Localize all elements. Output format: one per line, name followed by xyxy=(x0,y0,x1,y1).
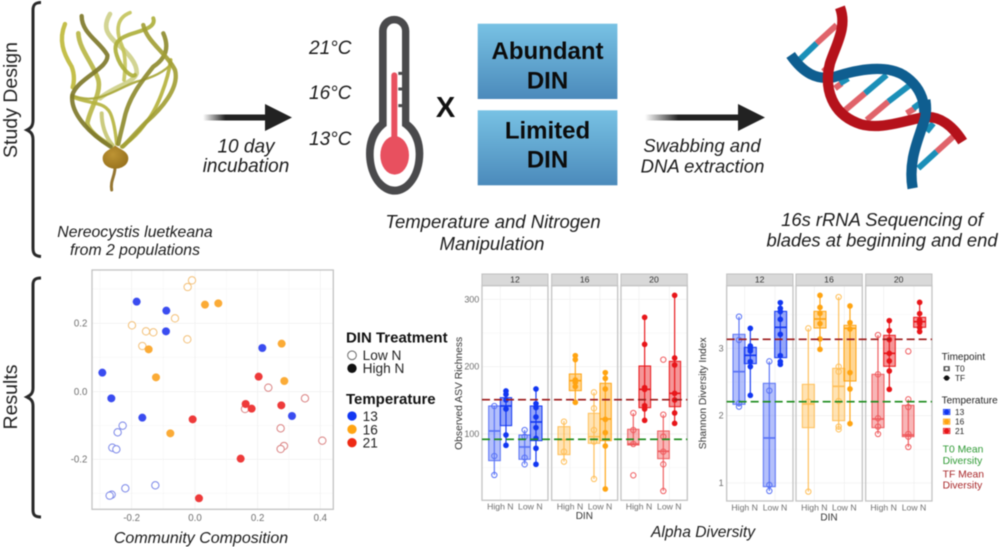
caption: species xyxy=(57,224,213,259)
Shannon axis labels: High N xyxy=(731,502,758,512)
Shannon axis labels: Low N xyxy=(902,502,926,512)
temperature labels: 13°C xyxy=(309,129,352,150)
temperature labels: 21°C xyxy=(308,38,352,59)
facet panels: 16 xyxy=(824,275,834,285)
legend: DIN treatment and temperature: High N xyxy=(363,361,404,376)
legend: DIN treatment and temperature: 16 xyxy=(363,422,378,437)
filled orange points xyxy=(145,299,288,437)
scatter y axis labels: -0.2 xyxy=(71,455,87,466)
caption: incubation: 10 day xyxy=(217,136,276,158)
legend: TF mean diversity: TF Mean xyxy=(943,469,984,480)
box: Limited DIN: Limited xyxy=(505,117,590,144)
arrow: incubation xyxy=(203,104,292,131)
richness axis labels xyxy=(454,294,682,522)
caption: species: Nereocystis luetkeana xyxy=(57,224,213,241)
box: Abundant DIN: DIN xyxy=(527,67,568,94)
caption: species: from 2 populations xyxy=(70,242,200,259)
box: Limited DIN xyxy=(478,110,617,185)
legend: timepoint xyxy=(942,352,985,383)
facet panels xyxy=(727,274,932,501)
icon: DNA helix xyxy=(791,7,963,188)
filled blue points xyxy=(98,298,296,422)
legend: DIN treatment and temperature: Low N xyxy=(363,348,401,363)
caption: manipulation xyxy=(385,211,601,254)
scatter x axis labels xyxy=(123,513,328,524)
scatter x axis labels: 0.4 xyxy=(314,513,328,524)
heading: Study Design: Study Design xyxy=(0,42,22,158)
facet panels: 20 xyxy=(894,275,904,285)
box: Limited DIN: DIN xyxy=(527,147,568,174)
legend: timepoint: TF xyxy=(955,373,965,383)
12 degree boxes xyxy=(733,303,787,494)
legend: DIN treatment and temperature: 13 xyxy=(363,409,378,424)
facet panels: 12 xyxy=(510,275,520,285)
box: Abundant DIN: Abundant xyxy=(492,38,603,65)
caption: swabbing: DNA extraction xyxy=(641,156,764,176)
scatter y axis labels: 0.2 xyxy=(74,319,87,330)
caption: incubation: incubation xyxy=(203,156,289,177)
caption: swabbing xyxy=(641,135,764,176)
caption: alpha diversity: Alpha Diversity xyxy=(650,524,756,541)
caption: community composition: Community Composition xyxy=(114,530,288,547)
legend: T0 mean diversity: Diversity xyxy=(943,456,983,467)
Shannon axis labels: 1 xyxy=(719,478,724,488)
multiply sign: X xyxy=(436,92,456,124)
filled red points xyxy=(189,373,285,502)
temperature labels xyxy=(308,38,352,150)
arrow: swabbing xyxy=(645,104,765,131)
legend: temperature: Temperature xyxy=(942,395,998,406)
legend: DIN treatment and temperature: Temperature xyxy=(346,391,436,408)
Shannon axis labels: Low N xyxy=(832,502,857,512)
Shannon axis labels: High N xyxy=(870,502,897,512)
richness axis labels: 100 xyxy=(464,429,479,439)
20 degree boxes xyxy=(628,295,681,494)
scatter y axis labels: 0.0 xyxy=(74,387,87,398)
scatter x axis labels: -0.2 xyxy=(123,513,140,524)
Shannon axis labels: Shannon Diversity Index xyxy=(698,337,709,449)
legend: DIN treatment and temperature: DIN Treatment xyxy=(346,329,448,346)
icon: kelp xyxy=(62,13,176,190)
16 degree boxes xyxy=(558,356,611,489)
richness axis labels: 200 xyxy=(464,362,479,372)
icon: thermometer xyxy=(366,16,423,195)
scatter x axis labels: 0.0 xyxy=(188,513,202,524)
richness axis labels: Observed ASV Richness xyxy=(454,337,465,450)
richness axis labels: Low N xyxy=(588,502,612,512)
facet panels xyxy=(482,274,687,500)
caption: sequencing: 16s rRNA Sequencing of xyxy=(781,209,985,230)
20 degree boxes xyxy=(872,302,926,450)
brace: results xyxy=(27,278,41,517)
richness axis labels: Low N xyxy=(518,502,543,512)
legend: DIN treatment and temperature: 21 xyxy=(363,436,378,451)
temperature labels: 16°C xyxy=(309,83,352,104)
legend: timepoint: T0 xyxy=(955,364,965,374)
legend: temperature: 16 xyxy=(955,417,965,427)
richness axis labels: Low N xyxy=(657,502,682,512)
facet panels: 12 xyxy=(755,275,765,285)
heading: Results: Results xyxy=(0,364,22,430)
open red points xyxy=(241,384,326,453)
legend: timepoint: Timepoint xyxy=(942,352,985,363)
chart: observed ASV richness boxplots xyxy=(454,274,687,522)
open orange points xyxy=(128,277,196,350)
legend: temperature xyxy=(942,395,998,436)
facet panels: 20 xyxy=(649,275,659,285)
legend: T0 mean diversity xyxy=(943,445,984,467)
richness axis labels: High N xyxy=(487,502,514,512)
scatter y axis labels xyxy=(71,319,87,466)
Shannon axis labels: DIN xyxy=(820,513,838,524)
richness axis labels: High N xyxy=(626,502,652,512)
legend: T0 mean diversity: T0 Mean xyxy=(943,445,984,456)
caption: sequencing xyxy=(766,209,998,251)
legend: DIN treatment and temperature xyxy=(346,329,448,451)
legend: temperature: 13 xyxy=(955,407,965,417)
caption: swabbing: Swabbing and xyxy=(643,135,761,156)
caption: manipulation: Manipulation xyxy=(440,233,544,254)
Shannon axis labels: 3 xyxy=(719,343,724,353)
chart: community composition scatter xyxy=(71,270,333,524)
scatter points xyxy=(98,277,326,502)
box: Abundant DIN xyxy=(478,24,617,99)
facet panels: 16 xyxy=(580,275,590,285)
Shannon axis labels: 2 xyxy=(719,411,724,421)
caption: sequencing: blades at beginning and end xyxy=(766,230,998,251)
legend: TF mean diversity xyxy=(943,469,984,492)
mean diversity lines xyxy=(482,400,687,439)
16 degree boxes xyxy=(802,294,856,494)
richness axis labels: DIN xyxy=(576,511,593,522)
caption: incubation xyxy=(203,136,289,177)
mean diversity lines xyxy=(727,339,932,402)
richness axis labels: 300 xyxy=(464,294,479,304)
richness axis labels: High N xyxy=(557,502,583,512)
Shannon axis labels xyxy=(698,337,926,524)
Shannon axis labels: Low N xyxy=(763,502,787,512)
open blue points xyxy=(106,422,159,499)
legend: TF mean diversity: Diversity xyxy=(943,481,983,492)
scatter x axis labels: 0.2 xyxy=(251,513,264,524)
brace: study design xyxy=(27,2,41,256)
caption: manipulation: Temperature and Nitrogen xyxy=(385,211,601,232)
Shannon axis labels: High N xyxy=(801,502,828,512)
chart: Shannon diversity boxplots xyxy=(698,274,998,524)
legend: temperature: 21 xyxy=(955,426,965,436)
12 degree boxes xyxy=(489,389,542,478)
